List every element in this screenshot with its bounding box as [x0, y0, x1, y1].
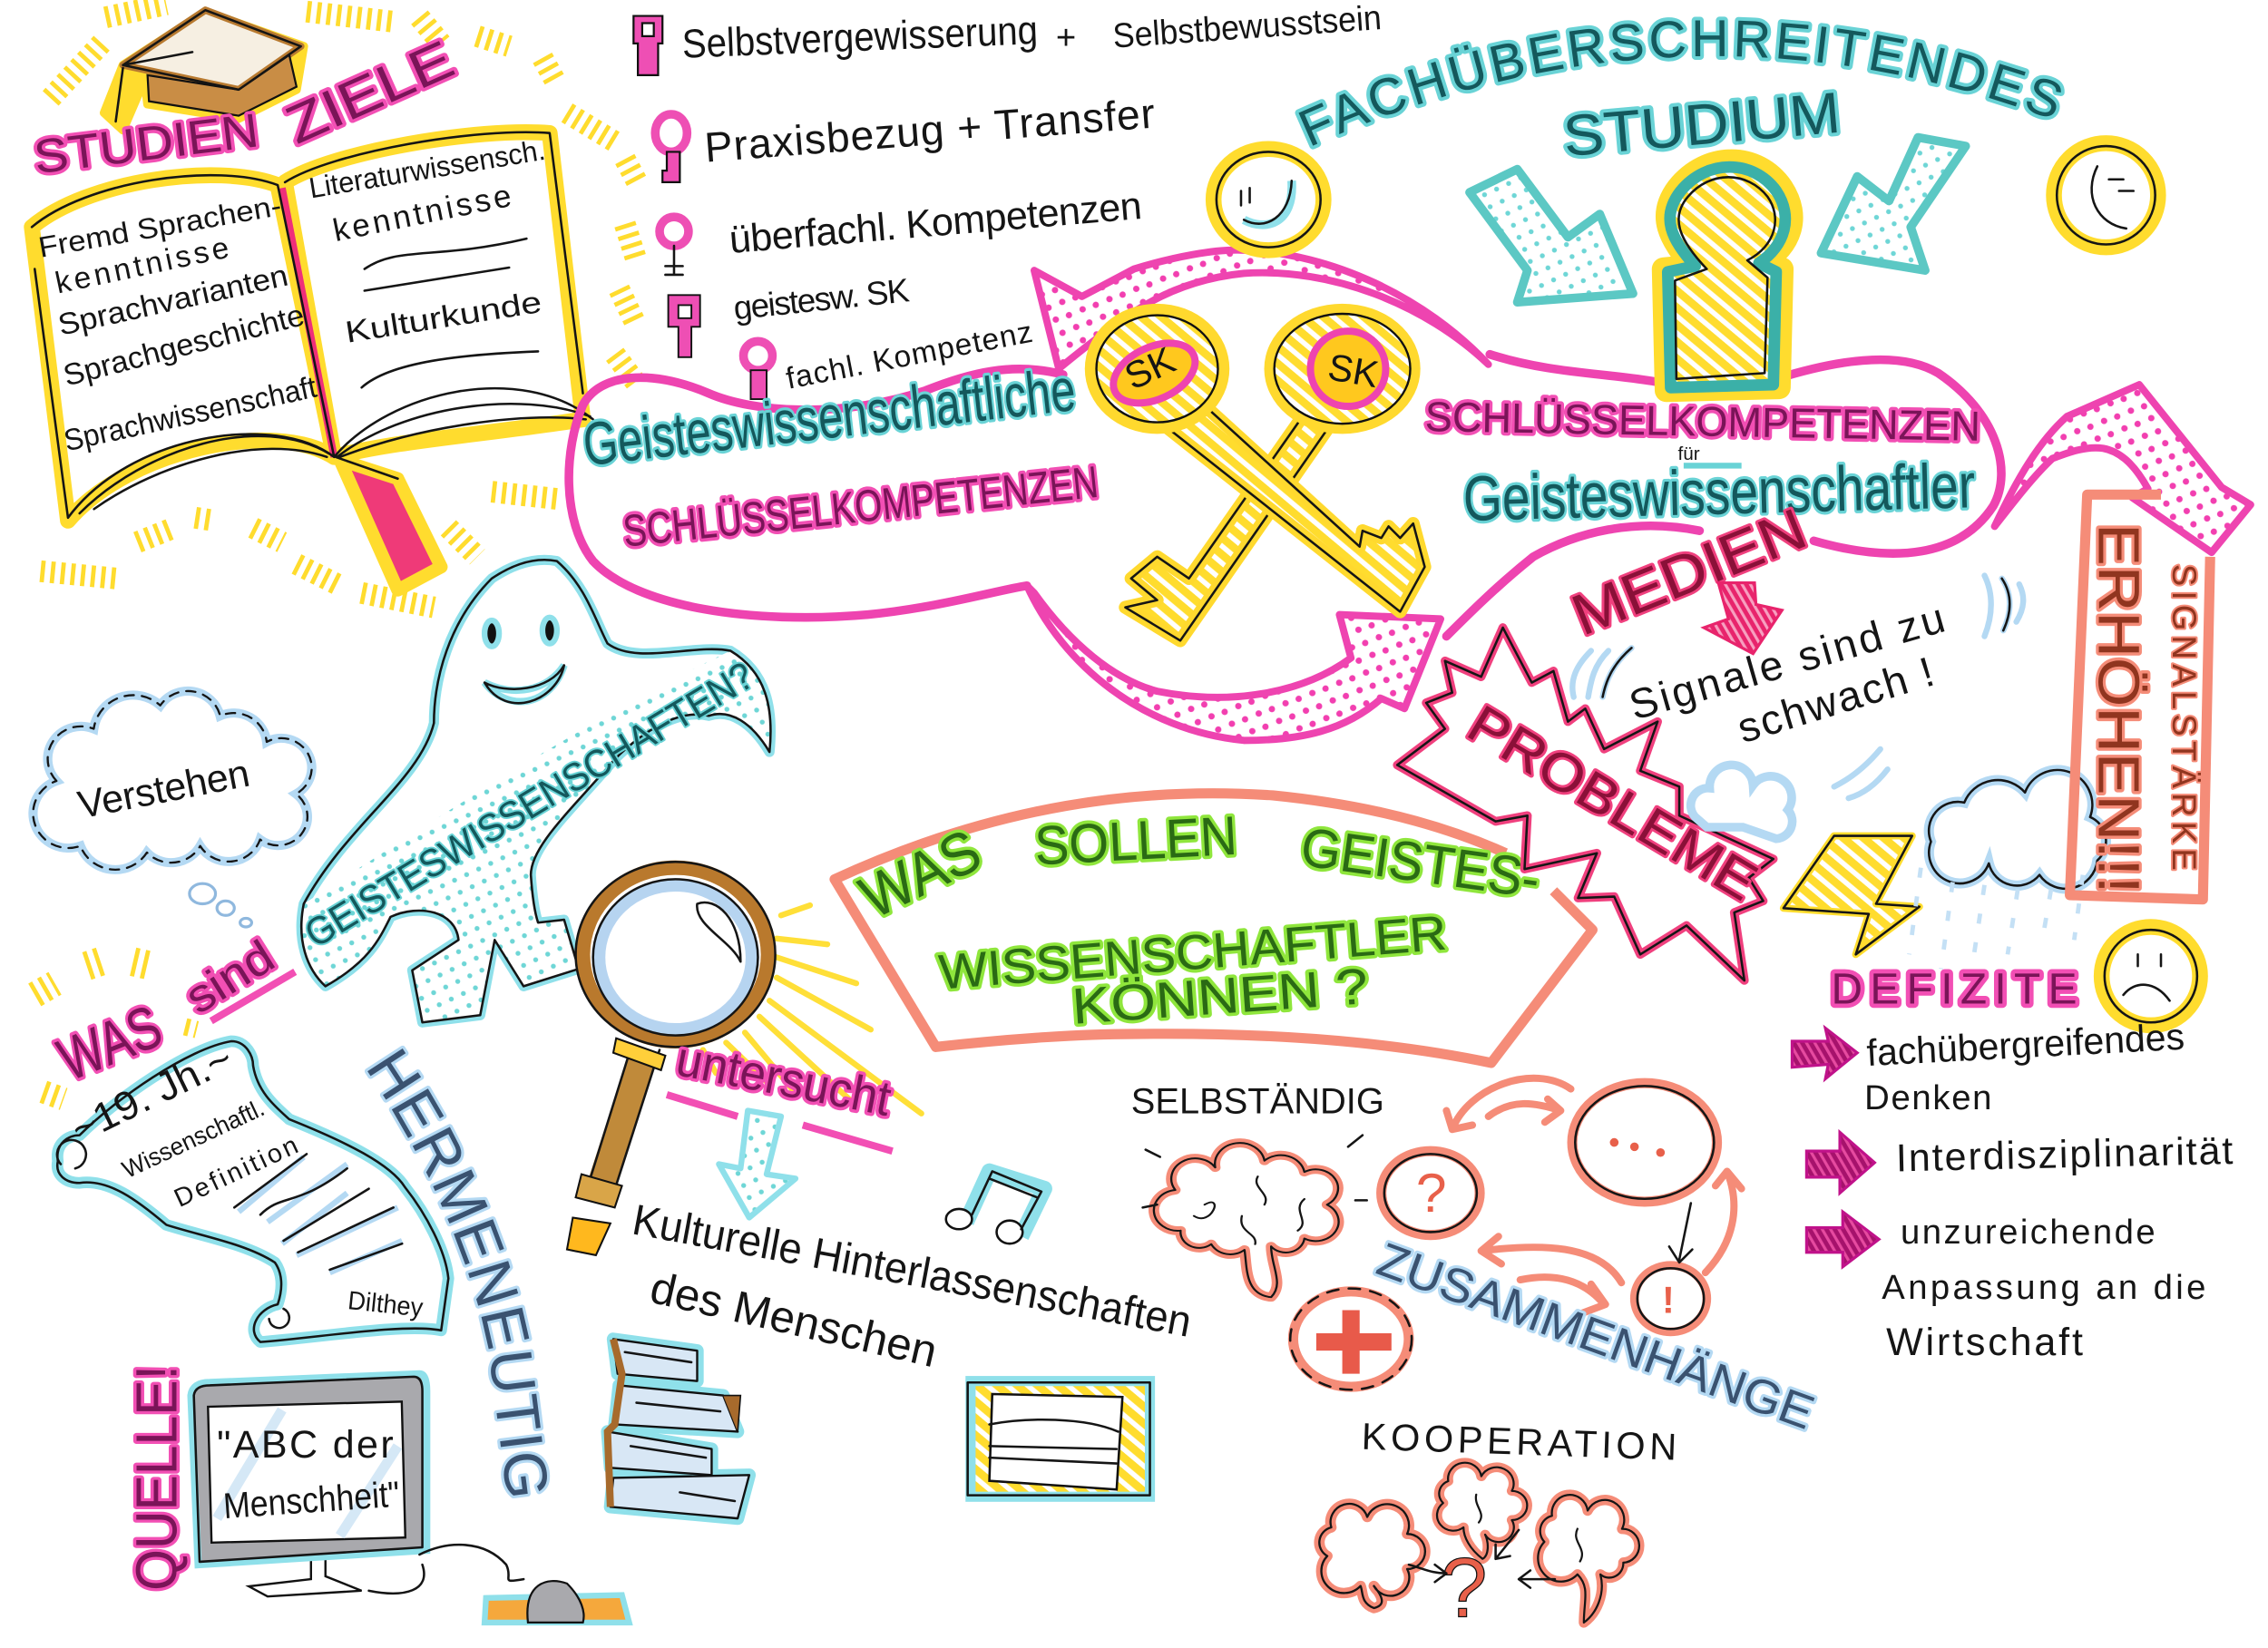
icon: exclamation circle [1635, 1265, 1706, 1331]
screen text [217, 1423, 401, 1526]
yellow rays around the book [41, 5, 637, 608]
icon: picture frame [968, 1381, 1150, 1497]
arrow: Medien down [1704, 583, 1782, 654]
ghost face [484, 618, 564, 703]
list item: fachübergreifendes Denken [1864, 1015, 2185, 1117]
icon: graduation cap [104, 10, 304, 131]
icon: smiley left [1214, 149, 1324, 250]
icon: exclamation circle: ! [1662, 1279, 1675, 1321]
scroll lines [234, 1154, 402, 1273]
heading: Quelle: QUELLE! [124, 1365, 190, 1591]
list item: Selbstvergewisserung: + [1056, 18, 1076, 57]
list item: unzureichende Anpassung an die Wirtschaft [1882, 1213, 2205, 1364]
scroll text: ~19. Jh.~ [64, 1036, 240, 1152]
magnifier lens [583, 868, 768, 1041]
question text: WISSENSCHAFTLER [937, 906, 1449, 1000]
question text: WAS [850, 816, 992, 932]
list: Defizite [1792, 1015, 2234, 1364]
heading: Fachübergreifendes Studium: STUDIUM [1560, 80, 1843, 169]
heading: Schlüsselkompetenzen für Geisteswissenschaftler: SCHLÜSSELKOMPETENZEN [1424, 393, 1980, 450]
cloud: small [1691, 765, 1793, 839]
icon: lightning [1784, 836, 1920, 954]
icon: stack of books [608, 1339, 749, 1518]
book right page [285, 132, 583, 457]
heading: Studien Ziele: ZIELE [277, 29, 463, 155]
cloud: Verstehen [33, 691, 312, 870]
list item: Selbstvergewisserung [681, 0, 1383, 67]
arrow: dotted, top-left [1034, 250, 1489, 369]
heading: Geisteswissenschaftliche Schlüsselkompetenzen: SCHLÜSSELKOMPETENZEN [621, 457, 1100, 557]
box: Signalstärke erhöhen [2070, 494, 2210, 900]
book line art [32, 132, 593, 518]
list item: unzureichende Anpassung an die Wirtschaft: Wirtschaft [1886, 1321, 2083, 1364]
illustration: ghost Geisteswissenschaften [298, 560, 770, 1022]
magnifier collar [613, 1039, 665, 1070]
book text: left page: Fremd Sprachen- [36, 189, 284, 264]
speech-cloud outline: right [1446, 355, 2001, 637]
arrows: network cycle [1446, 1078, 1742, 1313]
list item: unzureichende Anpassung an die Wirtschaft: Anpassung an die [1882, 1268, 2205, 1307]
computer cable [369, 1545, 523, 1594]
icon: question circle: ? [1416, 1162, 1447, 1224]
text: Signale sind zu schwach: schwach ! [1732, 648, 1940, 752]
arrow: teal right [1821, 137, 1966, 270]
screen text: Menschheit" [222, 1475, 401, 1526]
question text: SOLLEN [1033, 804, 1238, 876]
heading: Was sind: WAS [49, 992, 171, 1095]
icon: smiley right [2054, 143, 2158, 248]
question text: GEISTES- [1297, 815, 1544, 910]
monitor stand [249, 1555, 362, 1596]
list item: überfachl. Kompetenzen: überfachl. Kompetenzen [728, 184, 1143, 262]
key: right head, long shaft: SK [1325, 345, 1382, 395]
heading: Defizite: DEFIZITE [1831, 966, 2077, 1014]
icon: key 1 [633, 16, 662, 75]
heading: Was sind: sind [176, 930, 283, 1024]
book text: right page [307, 133, 547, 350]
text: untersucht: untersucht [672, 1032, 895, 1126]
monitor screen [208, 1401, 406, 1543]
icon: brain Selbständig [1143, 1136, 1367, 1297]
illustration: computer [191, 1374, 630, 1623]
heading: Schlüsselkompetenzen für Geisteswissenschaftler [1424, 393, 1980, 534]
book text: right page: kenntnisse [330, 178, 514, 249]
brain left [1319, 1504, 1425, 1608]
heading: Geisteswissenschaftliche Schlüsselkompetenzen [580, 356, 1100, 557]
icon: key 2 [655, 114, 687, 182]
label: Selbständig: SELBSTÄNDIG [1131, 1082, 1384, 1122]
screen text: "ABC der [217, 1423, 394, 1467]
illustration: three brains and question mark [1319, 1463, 1639, 1635]
book spine [282, 188, 334, 457]
yellow ticks near Was sind [34, 961, 197, 1099]
heading: Hermeneutig: HERMENEUTIG [365, 1045, 550, 1498]
question mark: ? [1441, 1541, 1487, 1635]
list item: geistesw. SK: geistesw. SK [731, 271, 912, 327]
book left page [32, 175, 334, 521]
box: Signalstärke erhöhen: SIGNALSTÄRKE [2165, 564, 2203, 871]
book bookmark ribbon [340, 460, 441, 590]
illustration: crossed keys [1085, 304, 1424, 640]
cloud: rain [1910, 770, 2106, 969]
arrow: Defizit 1 [1792, 1029, 1857, 1078]
heading: Medien: MEDIEN [1563, 495, 1815, 648]
scroll text: Wissenschaftl. [118, 1093, 269, 1184]
arrow: dotted, right [1995, 385, 2251, 552]
scroll text: Definition [170, 1131, 303, 1214]
brain top [1437, 1463, 1527, 1559]
list item: fachübergreifendes Denken: fachübergreifendes [1865, 1015, 2185, 1074]
key: left head, long shaft: SK [1118, 338, 1182, 398]
scroll text: Dilthey [347, 1286, 425, 1323]
heading: Was sind [49, 930, 295, 1095]
icon: music note [946, 1171, 1044, 1243]
book text: left page: Sprachgeschichte [60, 298, 308, 393]
icon: keyhole [1664, 161, 1792, 391]
book text: left page [36, 189, 320, 458]
scroll text [64, 1036, 425, 1323]
box: Signalstärke erhöhen: ERHÖHEN!!! [2086, 523, 2151, 893]
magnifier tip [567, 1217, 611, 1255]
text: Kooperation: KOOPERATION [1361, 1415, 1677, 1468]
magnifier rays [703, 905, 922, 1114]
icon: key 5 [744, 341, 772, 399]
cooperation arrows [1409, 1530, 1555, 1588]
heading: Schlüsselkompetenzen für Geisteswissenschaftler: für [1677, 444, 1700, 464]
text: Signale sind zu schwach: Signale sind zu [1624, 594, 1950, 729]
text: Zusammenhänge: ZUSAMMENHÄNGE [1371, 1233, 1821, 1440]
list item: unzureichende Anpassung an die Wirtschaft: unzureichende [1901, 1213, 2156, 1252]
heading: Schlüsselkompetenzen für Geisteswissenschaftler: Geisteswissenschaftler [1462, 449, 1976, 534]
book text: left page: Sprachvarianten [55, 259, 291, 343]
text: Kulturelle Hinterlassenschaften des Menschen: des Menschen [646, 1263, 942, 1377]
arrow: Defizit 2 [1806, 1132, 1874, 1193]
panel: Was sollen Geisteswissenschaftler können [835, 794, 1592, 1063]
heading: Studien Ziele: STUDIEN [31, 103, 261, 184]
illustration: open book [32, 132, 593, 590]
book text: left page: Sprachwissenschaft [61, 371, 320, 458]
icon: key 3 [660, 217, 689, 275]
illustration: magnifying glass [567, 862, 922, 1255]
cloud: Verstehen: Verstehen [74, 752, 253, 827]
list item: Praxisbezug: Praxisbezug + Transfer [703, 90, 1157, 171]
brain right [1538, 1495, 1639, 1623]
icon: key 4 [669, 295, 700, 357]
icon: question circle [1382, 1151, 1480, 1235]
arrow: Defizit 3 [1806, 1212, 1879, 1267]
key: right head, long shaft [1125, 304, 1421, 640]
icon: thought bubbles [190, 883, 251, 927]
key: left head, long shaft [1085, 304, 1424, 611]
screen reflections [217, 1410, 397, 1536]
magnifier handle [596, 1048, 645, 1200]
speech-cloud outline: left [569, 369, 1063, 618]
book text: right page: Literaturwissensch. [307, 133, 547, 204]
illustration: scroll [57, 1036, 448, 1342]
starburst: Probleme [1397, 628, 1774, 980]
list item: fachl. Kompetenz: fachl. Kompetenz [783, 316, 1035, 396]
sound waves [1572, 576, 2023, 798]
text: Kulturelle Hinterlassenschaften des Menschen: Kulturelle Hinterlassenschaften [629, 1196, 1195, 1347]
arrow: teal left [1470, 170, 1633, 302]
starburst: Probleme: PROBLEME [1458, 694, 1767, 912]
list item: Interdisziplinarität: Interdisziplinarität [1895, 1129, 2234, 1180]
monitor [191, 1374, 426, 1565]
heading: Fachübergreifendes Studium: FACHÜBERSCHREITENDES [1295, 16, 2065, 150]
list item: Selbstvergewisserung: Selbstvergewisserung [681, 8, 1039, 67]
question text: KÖNNEN ? [1070, 957, 1370, 1035]
icon: speech circle [1572, 1083, 1717, 1202]
list item: fachübergreifendes Denken: Denken [1864, 1078, 1991, 1117]
computer mouse on pad [484, 1581, 630, 1623]
book text: right page: Kulturkunde [343, 286, 544, 350]
heading: Studien Ziele [31, 29, 463, 184]
question text [850, 804, 1544, 1035]
list: key competences [633, 0, 1383, 399]
ghost label: GEISTESWISSENSCHAFTEN? [298, 654, 761, 957]
heading: Geisteswissenschaftliche Schlüsselkompetenzen: Geisteswissenschaftliche [580, 356, 1079, 479]
arrow: untersucht down [719, 1111, 796, 1217]
book text: left page: kenntnisse [53, 231, 232, 301]
icon: plus circle [1290, 1289, 1412, 1390]
arrow: dotted, bottom [1027, 586, 1441, 740]
icon: sad face [2102, 927, 2200, 1025]
